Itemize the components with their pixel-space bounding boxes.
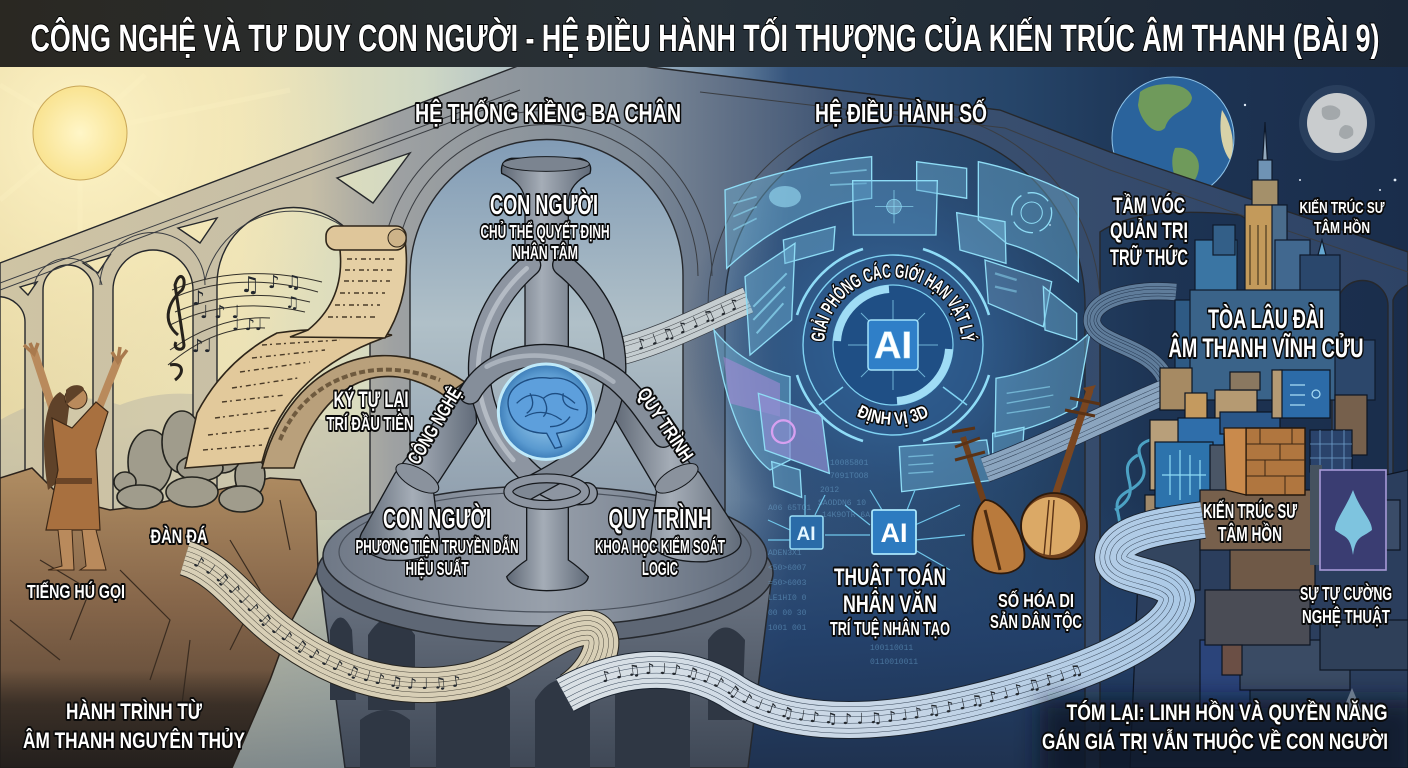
label: soul architect center: TÂM HỒN xyxy=(1218,522,1282,546)
icon: moon lute xyxy=(1021,385,1100,559)
panel lower-center xyxy=(899,440,993,492)
icon: moon xyxy=(1299,85,1375,161)
label: right pillar: QUY TRÌNH xyxy=(608,503,712,534)
faint code text: =50>6003 xyxy=(768,579,807,588)
music ribbon: cream left xyxy=(180,540,620,704)
icon: glowing sound wave xyxy=(1110,440,1150,545)
brain medallion xyxy=(498,364,594,459)
panel small right xyxy=(957,213,1006,263)
scroll with notation xyxy=(185,226,465,468)
cliff xyxy=(0,468,318,768)
faint code text: 10085801 xyxy=(830,459,869,468)
icon: rock xylophone stones xyxy=(114,411,265,512)
panel brain xyxy=(725,157,872,268)
panel small lower-left xyxy=(772,462,802,497)
label: eternal castle xyxy=(1168,303,1364,363)
faint code text: LE1HI0 0 xyxy=(768,594,807,603)
icon: sun xyxy=(0,75,290,240)
label: AI core: AI xyxy=(874,325,912,367)
label: soul architect center: KIẾN TRÚC SƯ xyxy=(1203,499,1297,523)
label: soul architect top: TÂM HỒN xyxy=(1314,218,1370,237)
floating staff with clef and notes: ♪♩ xyxy=(192,336,212,357)
label: howl: TIẾNG HÚ GỌI xyxy=(27,581,125,602)
label: left pillar xyxy=(356,503,518,579)
label: humane algorithm xyxy=(830,563,950,639)
music ribbon: cream left: ♪ ♩ ♫ ♪ ♩ ♪ ♫ ♩ ♪ ♫ ♪ ♩ ♪ ♫ ♩ ♪ ♫ ♪ ♩ ♫ ♪ xyxy=(194,557,460,690)
label: leg technology: CÔNG NGHỆ xyxy=(403,383,466,468)
panel back small xyxy=(783,227,835,263)
label: stone instrument: ĐÀN ĐÁ xyxy=(150,526,208,548)
label: first characters: KÝ TỰ LẠI xyxy=(334,387,408,412)
footer right caption xyxy=(1042,700,1388,754)
music ribbon: silver-blue right xyxy=(556,501,1206,739)
floating staff with clef and notes: ♫ xyxy=(285,293,299,312)
label: digitized heritage: SỐ HÓA DI xyxy=(998,590,1074,611)
label: first characters: TRÍ ĐẦU TIÊN xyxy=(326,413,414,434)
label: curved free limits: GIẢI PHÓNG CÁC GIỚI HẠN VẬT LÝ xyxy=(809,260,980,342)
label: top pillar human: CON NGƯỜI xyxy=(490,189,598,220)
knot tubes xyxy=(470,265,663,505)
faint code text xyxy=(768,459,918,667)
label: soul architect center xyxy=(1203,499,1297,546)
label: stature: TRỮ THỨC xyxy=(1110,245,1188,270)
label: right pillar xyxy=(595,503,725,579)
icon: AI chips with traces: AI xyxy=(880,518,908,548)
label: stature: TẦM VÓC xyxy=(1113,193,1185,218)
music ribbon: silver-blue right: ♪ ♩ ♫ ♪ ♩ ♪ ♫ ♩ ♪ ♫ ♪ ♩ ♪ ♫ ♩ ♪ ♫ ♪ ♩ ♫ ♪ ♩ ♪ ♫ ♪ ♩ ♫ ♪ ♩ ♪ ♫ ♪ ♩ ♫ xyxy=(604,663,1081,726)
faint code text: 14K9OTR 6A xyxy=(822,511,870,520)
music ribbon: upper middle: ♪ ♩ ♫ ♪ ♩ ♫ ♩ ♪ xyxy=(639,299,736,350)
footer left caption xyxy=(23,699,245,753)
label: stature: QUẢN TRỊ xyxy=(1110,218,1188,243)
floating staff with clef and notes: ♪ ♫ xyxy=(268,272,301,293)
label: right pillar: KHOA HỌC KIỂM SOÁT xyxy=(595,536,725,557)
icon: AI chips with traces xyxy=(768,490,965,570)
label: eternal castle: TÒA LÂU ĐÀI xyxy=(1208,303,1324,334)
panel target xyxy=(853,181,937,235)
right leg: process xyxy=(613,370,741,562)
faint code text: 0110010011 xyxy=(870,658,918,667)
label: top pillar human xyxy=(480,189,610,263)
bottom-left dark band xyxy=(0,670,275,768)
panel back top xyxy=(917,162,967,198)
icon: AI chips with traces: AI xyxy=(796,524,816,545)
faint code text: <50>6007 xyxy=(768,564,807,573)
panel lower-right small xyxy=(993,427,1024,455)
label: leg process: QUY TRÌNH xyxy=(632,384,698,466)
label: stature xyxy=(1110,193,1188,270)
label: humane algorithm: THUẬT TOÁN xyxy=(834,563,946,591)
faint code text: ADEN3X1 xyxy=(768,549,802,558)
faint code text: SAODDN6 10 xyxy=(818,499,866,508)
faint code text: A06 65TO1 xyxy=(768,504,811,513)
panel: hub glow xyxy=(680,130,1110,560)
label: left pillar: CON NGƯỜI xyxy=(383,503,491,534)
faint code text: 7091TOO8 xyxy=(830,472,869,481)
bottom-right dark band xyxy=(1040,700,1408,768)
panel chart right xyxy=(985,260,1052,327)
label: right pillar: LOGIC xyxy=(642,559,678,579)
faint code text: 100110011 xyxy=(870,644,913,653)
label: soul architect top xyxy=(1300,198,1385,237)
panel lower-right xyxy=(995,333,1090,437)
section heading: digital OS: HỆ ĐIỀU HÀNH SỐ xyxy=(815,98,987,128)
panel AI ring xyxy=(978,162,1078,282)
label: top pillar human: NHÂN TÂM xyxy=(512,242,578,263)
column upper xyxy=(501,157,591,350)
stars xyxy=(1049,104,1396,301)
label: humane algorithm: TRÍ TUỆ NHÂN TẠO xyxy=(830,618,950,639)
floating staff with clef and notes: ♫ xyxy=(240,273,260,298)
panel waveform left xyxy=(745,243,795,355)
label: top pillar human: CHỦ THỂ QUYẾT ĐỊNH xyxy=(480,221,610,242)
label: curved 3D positioning: ĐỊNH VỊ 3D xyxy=(856,403,929,428)
label: digitized heritage: SẢN DÂN TỘC xyxy=(990,611,1082,632)
label: digitized heritage xyxy=(990,590,1082,632)
label: first characters xyxy=(326,387,414,434)
icon: lute pear-shaped xyxy=(952,428,1024,574)
pedestal xyxy=(317,486,773,768)
faint code text: 1001 001 xyxy=(768,624,807,633)
music ribbon: upper middle xyxy=(622,287,754,364)
music ribbon: right upper xyxy=(985,291,1176,470)
icon: AI core rings xyxy=(797,249,989,441)
castle: purple soul panel xyxy=(1310,465,1386,570)
column lower xyxy=(507,503,588,591)
holographic panels around AI core xyxy=(714,157,1090,497)
panel lower-left purple xyxy=(714,330,790,470)
section heading: tripod: HỆ THỐNG KIỀNG BA CHÂN xyxy=(415,98,681,128)
figure: primitive man calling xyxy=(24,343,127,570)
panel right narrow xyxy=(1043,287,1077,340)
floating staff with clef and notes: ♩ ♪♩ xyxy=(232,315,262,334)
faint code text: 2012 xyxy=(820,486,839,495)
floating staff with clef and notes: ♪ xyxy=(192,286,205,310)
label: left pillar: PHƯƠNG TIỆN TRUYỀN DẪN xyxy=(356,536,518,557)
label: left pillar: HIỆU SUẤT xyxy=(406,558,468,579)
left leg: technology xyxy=(360,370,477,560)
castle: foundation blocks xyxy=(1130,368,1408,768)
label: humane algorithm: NHÂN VĂN xyxy=(843,590,937,618)
icon: earth xyxy=(1112,77,1234,199)
panel lower-left ring xyxy=(758,393,829,473)
label: artistic strength xyxy=(1300,583,1392,627)
chart: tripod with knot and legs xyxy=(360,157,741,591)
icon: small peak mark xyxy=(1342,688,1362,712)
faint code text: 00 00 30 xyxy=(768,609,807,618)
floating staff with clef and notes xyxy=(168,272,322,380)
footer left caption: ÂM THANH NGUYÊN THỦY xyxy=(23,728,245,753)
title bar xyxy=(0,0,1408,67)
castle: skyscrapers xyxy=(1175,122,1375,400)
floating staff with clef and notes: ♩ ♪ ♩ xyxy=(200,302,240,323)
footer left caption: HÀNH TRÌNH TỪ xyxy=(66,699,203,724)
castle: brick cube xyxy=(1224,428,1305,495)
